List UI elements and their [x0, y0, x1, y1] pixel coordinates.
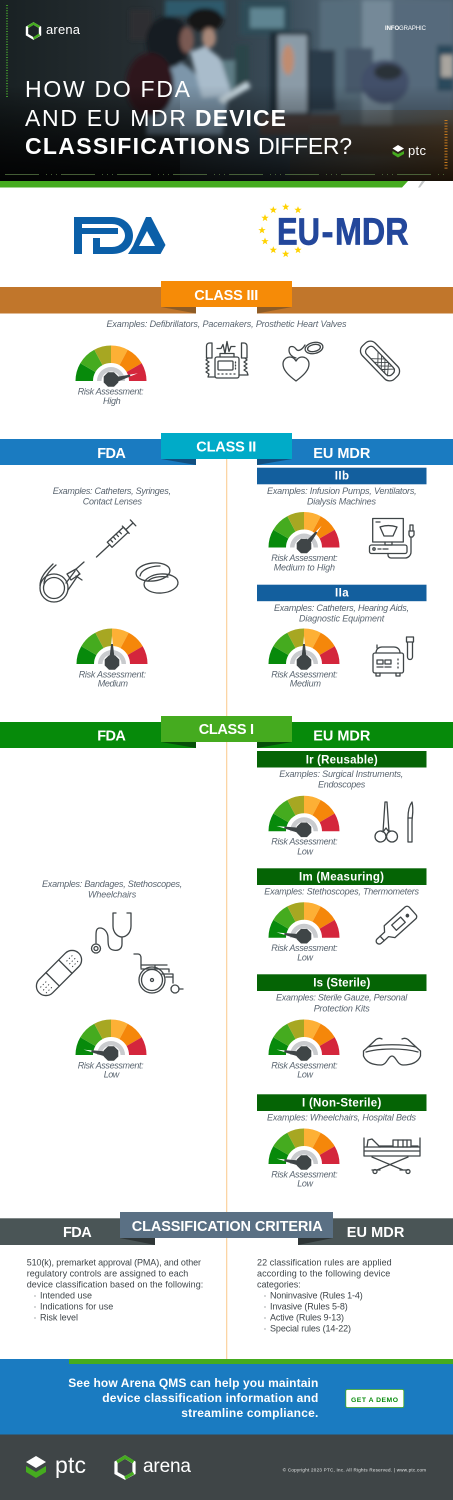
Ir label: Ir (Reusable)	[306, 754, 378, 766]
FDA criteria text	[27, 1258, 203, 1323]
risk: medium	[79, 670, 146, 689]
FDA criteria text: ·	[34, 1291, 36, 1301]
risk: IIa medium: Medium	[290, 679, 322, 689]
copyright: © Copyright 2023 PTC, Inc. All Rights Reserved. | www.ptc.com	[283, 1466, 426, 1472]
EU MDR criteria text: ·	[264, 1324, 266, 1334]
Im label: Im (Measuring)	[299, 872, 384, 884]
risk: I low: Low	[297, 1179, 314, 1189]
icon: thermometer	[372, 905, 418, 949]
Is examples	[276, 993, 408, 1014]
Im bar	[257, 868, 426, 885]
EU MDR criteria text: according to the following device	[257, 1269, 390, 1279]
class II EU MDR label: EU MDR	[313, 446, 371, 462]
hero title: HOW DO FDA	[25, 76, 191, 102]
gauge: Ir low	[268, 796, 340, 837]
EU MDR criteria text: 22 classification rules are applied	[257, 1258, 392, 1268]
class III examples: Examples: Defibrillators, Pacemakers, Prosthetic Heart Valves	[106, 319, 347, 329]
CTA button: GET A DEMO	[351, 1397, 398, 1404]
infographic label: INFOGRAPHIC	[385, 26, 427, 32]
class I FDA examples: Examples: Bandages, Stethoscopes,	[42, 879, 182, 889]
icon: catheter	[40, 562, 84, 602]
EU MDR criteria text: ·	[264, 1302, 266, 1312]
hero title: CLASSIFICATIONS	[25, 133, 250, 159]
criteria FDA label: FDA	[63, 1225, 92, 1241]
class II left band	[0, 439, 196, 465]
hero arena logo: arena	[46, 22, 81, 37]
I label: I (Non-Sterile)	[302, 1098, 381, 1110]
CTA green stripe	[69, 1359, 453, 1364]
class III heading: CLASS III	[194, 288, 258, 304]
class III tab	[161, 281, 292, 307]
risk: high	[78, 387, 144, 406]
CTA background	[0, 1359, 453, 1434]
criteria tab	[120, 1212, 333, 1238]
IIa examples: Examples: Catheters, Hearing Aids,	[274, 603, 409, 613]
class I ribbon folds	[161, 742, 292, 748]
risk: I low: Risk Assessment:	[271, 1170, 338, 1180]
FDA criteria text: Risk level	[40, 1313, 78, 1323]
class I left band	[0, 722, 196, 748]
hero title: DEVICE	[195, 105, 286, 131]
Im examples: Examples: Stethoscopes, Thermometers	[264, 887, 420, 897]
risk: medium to high: Medium to High	[274, 563, 335, 573]
FDA criteria text: 510(k), premarket approval (PMA), and other	[27, 1258, 201, 1268]
Ir examples	[279, 769, 403, 790]
EU MDR criteria text: ·	[264, 1313, 266, 1323]
risk: IIa medium: Risk Assessment:	[271, 670, 338, 680]
Ir bar	[257, 751, 426, 768]
footer arena logo: arena	[143, 1456, 191, 1477]
hero title: AND EU MDR	[25, 105, 186, 131]
class III white notch	[196, 307, 257, 314]
icon: defibrillator	[206, 342, 248, 378]
risk: Ir low: Risk Assessment:	[271, 837, 338, 847]
risk: Is low: Low	[297, 1070, 314, 1080]
icon: contact lenses	[135, 561, 179, 594]
class II right band	[257, 439, 453, 465]
IIb label: IIb	[335, 471, 349, 483]
risk: medium: Medium	[98, 679, 128, 689]
class II tab	[161, 433, 292, 459]
class II ribbon folds	[161, 459, 292, 465]
hero photo background	[0, 0, 453, 181]
risk: high: Risk Assessment:	[78, 387, 144, 397]
risk: Im low: Low	[297, 953, 314, 963]
criteria ribbon folds	[120, 1238, 333, 1245]
IIa label: IIa	[335, 588, 349, 600]
hero panel	[0, 0, 453, 181]
FDA criteria text: Indications for use	[40, 1302, 113, 1312]
risk: Ir low	[271, 837, 338, 856]
criteria heading: CLASSIFICATION CRITERIA	[132, 1219, 323, 1235]
EU-MDR logo	[258, 203, 408, 257]
I examples: Examples: Wheelchairs, Hospital Beds	[267, 1113, 416, 1123]
risk: high: High	[103, 396, 121, 406]
FDA criteria text: ·	[34, 1313, 36, 1323]
EU-MDR wordmark: -	[322, 212, 334, 254]
criteria left band	[0, 1218, 155, 1245]
icon: stethoscope	[92, 913, 131, 953]
hero ptc logo	[392, 143, 426, 158]
CTA text: streamline compliance.	[181, 1406, 318, 1420]
IIa examples: Diagnostic Equipment	[299, 614, 385, 624]
risk: Ir low: Low	[297, 846, 314, 856]
icon: lab equipment	[373, 637, 414, 676]
FDA criteria text: ·	[34, 1302, 36, 1312]
gauge: I low	[268, 1128, 340, 1170]
CTA text	[68, 1376, 318, 1420]
EU stars	[258, 203, 302, 257]
hero arena logo	[27, 22, 81, 38]
class I right band	[257, 722, 453, 748]
gauge: low	[76, 1020, 146, 1061]
gauge: IIa medium	[268, 628, 340, 670]
icon: ultrasound	[370, 518, 414, 558]
I bar	[257, 1094, 426, 1111]
risk: medium to high: Risk Assessment:	[271, 553, 338, 563]
class I tab	[161, 716, 292, 742]
IIb examples: Dialysis Machines	[307, 497, 376, 507]
risk: medium: Risk Assessment:	[79, 670, 146, 680]
Ir examples: Examples: Surgical Instruments,	[279, 769, 403, 779]
gauge: Im low	[268, 902, 340, 944]
FDA logo	[74, 217, 166, 254]
risk: Is low: Risk Assessment:	[271, 1060, 338, 1070]
class III band	[0, 287, 453, 314]
class II FDA label: FDA	[97, 446, 126, 462]
EU-MDR wordmark	[277, 212, 408, 254]
EU MDR criteria text: Invasive (Rules 5-8)	[270, 1302, 348, 1312]
IIb examples: Examples: Infusion Pumps, Ventilators,	[267, 486, 417, 496]
risk: low	[78, 1061, 144, 1080]
EU-MDR wordmark: MDR	[335, 212, 408, 254]
footer ptc logo	[26, 1452, 86, 1478]
hero title	[25, 76, 352, 159]
CTA text: device classification information and	[102, 1391, 318, 1405]
FDA criteria text: regulatory controls are assigned to each	[27, 1269, 188, 1279]
icon: hospital bed	[364, 1138, 420, 1174]
risk: Im low	[271, 943, 338, 963]
EU MDR criteria text: Special rules (14-22)	[270, 1324, 351, 1334]
icon: pacemaker	[283, 341, 324, 381]
class III ribbon folds	[161, 307, 292, 314]
center divider	[226, 459, 227, 1359]
EU MDR criteria text: ·	[264, 1291, 266, 1301]
class II FDA examples: Contact Lenses	[83, 497, 142, 507]
gauge: medium	[76, 628, 148, 670]
icon: bandage	[32, 946, 86, 1000]
icon: wheelchair	[134, 954, 183, 993]
FDA criteria text: device classification based on the following:	[27, 1280, 203, 1290]
risk: medium to high	[271, 553, 338, 573]
CTA text: See how Arena QMS can help you maintain	[68, 1376, 318, 1390]
Ir examples: Endoscopes	[318, 780, 366, 790]
EU MDR criteria text: categories:	[257, 1280, 301, 1290]
risk: Im low: Risk Assessment:	[271, 943, 338, 953]
panel: call to action	[0, 1359, 453, 1434]
risk: IIa medium	[271, 670, 338, 689]
risk: I low	[271, 1170, 338, 1189]
class II FDA examples	[53, 486, 171, 507]
IIa bar	[257, 585, 426, 601]
hero title: DIFFER?	[258, 133, 352, 159]
risk: Is low	[271, 1060, 338, 1080]
panel: classification criteria	[0, 1212, 453, 1334]
panel: class III	[0, 281, 453, 406]
Is examples: Examples: Sterile Gauze, Personal	[276, 993, 408, 1003]
criteria right band	[298, 1218, 453, 1245]
class I FDA label: FDA	[97, 728, 126, 744]
FDA criteria text: Intended use	[40, 1291, 92, 1301]
EU MDR criteria text: Noninvasive (Rules 1-4)	[270, 1291, 363, 1301]
panel: class I	[0, 716, 453, 1189]
EU MDR criteria text: Active (Rules 9-13)	[270, 1313, 344, 1323]
gauge: high	[76, 346, 146, 387]
class II heading: CLASS II	[196, 440, 256, 456]
EU MDR criteria text	[257, 1258, 392, 1334]
CTA button	[346, 1390, 404, 1408]
class II FDA examples: Examples: Catheters, Syringes,	[53, 486, 171, 496]
class I heading: CLASS I	[199, 722, 254, 738]
gauge: medium to high	[268, 512, 340, 553]
panel: footer	[0, 1434, 453, 1500]
footer arena logo	[116, 1456, 191, 1478]
icon: heart valve	[358, 338, 402, 384]
footer ptc logo: ptc	[55, 1452, 86, 1478]
icon: forceps and scalpel	[375, 802, 413, 842]
hero ptc logo: ptc	[408, 143, 426, 158]
class I EU MDR label: EU MDR	[313, 728, 371, 744]
IIa examples	[274, 603, 409, 624]
panel: class II	[0, 433, 453, 689]
icon: syringe	[93, 519, 136, 561]
criteria EU MDR label: EU MDR	[347, 1225, 405, 1241]
Is label: Is (Sterile)	[313, 978, 370, 990]
risk: low: Low	[104, 1070, 120, 1080]
green accent bar	[0, 181, 408, 188]
class I FDA examples	[42, 879, 182, 900]
grey accent slash	[418, 181, 425, 188]
IIb bar	[257, 468, 426, 484]
risk: low: Risk Assessment:	[78, 1061, 144, 1071]
Is bar	[257, 974, 426, 991]
EU-MDR wordmark: EU	[277, 212, 320, 254]
gauge: Is low	[268, 1020, 340, 1061]
footer background	[0, 1434, 453, 1500]
Is examples: Protection Kits	[314, 1004, 370, 1014]
class I FDA examples: Wheelchairs	[88, 890, 137, 900]
IIb examples	[267, 486, 417, 507]
icon: goggles	[364, 1038, 420, 1065]
